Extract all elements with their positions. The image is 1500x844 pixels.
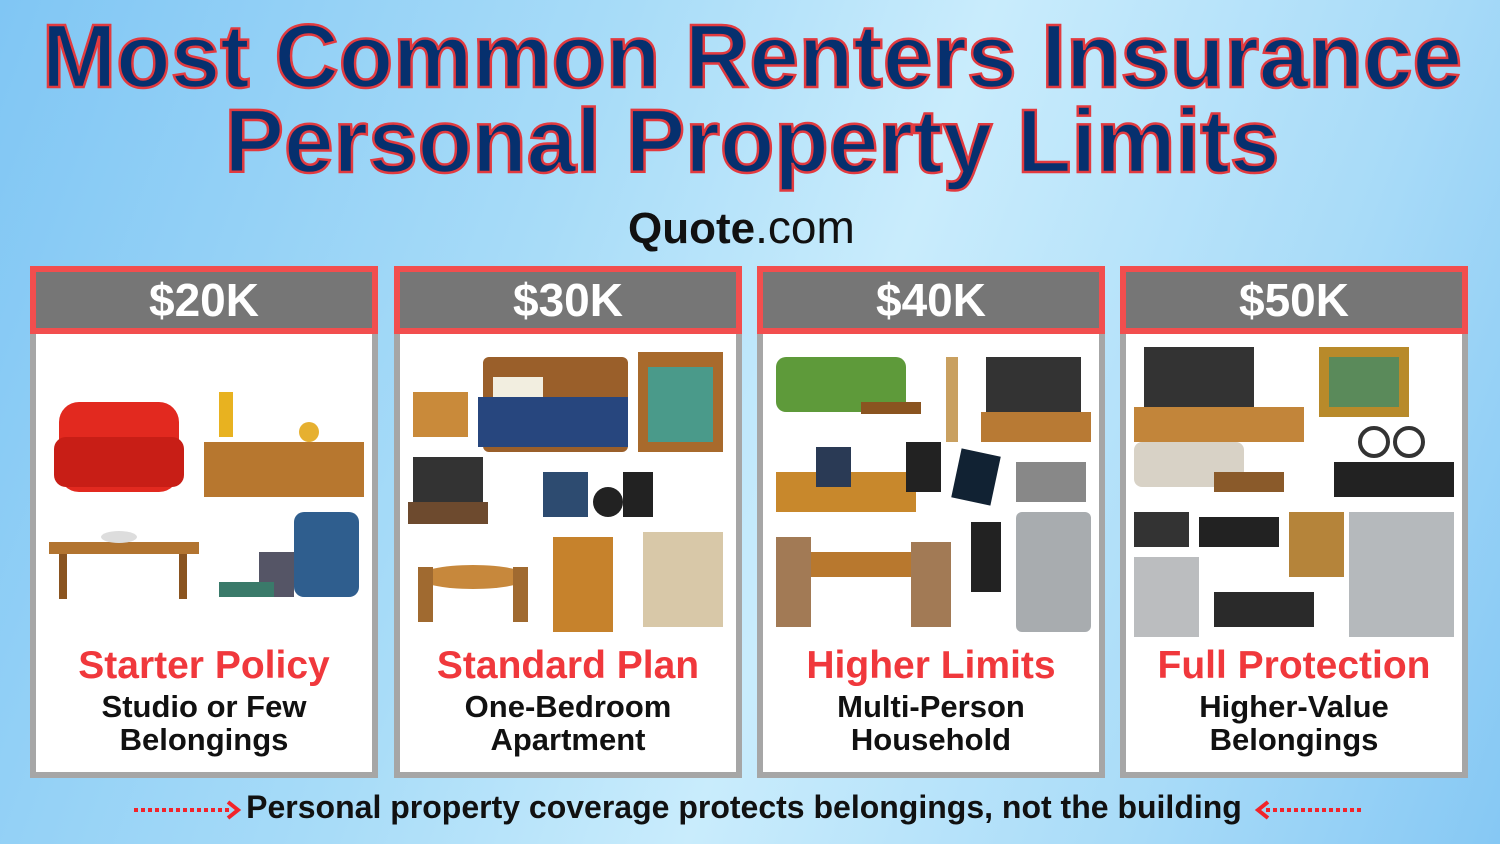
description: Higher-Value [1199, 689, 1389, 724]
description [102, 689, 306, 757]
footer note with arrows [134, 789, 1361, 825]
description: Belongings [1210, 722, 1378, 757]
footer text: Personal property coverage protects belongings, not the building [246, 789, 1242, 825]
description: Multi-Person [837, 689, 1025, 724]
card 3 [757, 266, 1105, 778]
illustration: starter furniture [49, 392, 364, 599]
illustration: household goods [776, 357, 1091, 632]
arrow: left [134, 800, 242, 820]
description [837, 689, 1025, 757]
header: $30K [394, 266, 742, 334]
arrow: right [1254, 800, 1361, 820]
description [1199, 689, 1389, 757]
header: $30K: $30K [513, 274, 623, 326]
header: $50K: $50K [1239, 274, 1349, 326]
logo: Quote.com [628, 201, 855, 253]
card 2 [394, 266, 742, 778]
header: $40K [757, 266, 1105, 334]
card 1 [30, 266, 378, 778]
illustration: high-value belongings [1134, 347, 1454, 637]
description: Belongings [120, 722, 288, 757]
label: Higher Limits [806, 644, 1056, 687]
title [42, 7, 1462, 192]
illustration: one-bedroom furniture [408, 352, 723, 632]
label: Starter Policy [78, 644, 330, 687]
title: Personal Property Limits [224, 92, 1280, 192]
description: One-Bedroom [465, 689, 671, 724]
description: Apartment [490, 722, 646, 757]
description [465, 689, 671, 757]
title: Most Common Renters Insurance [42, 7, 1462, 107]
header: $40K: $40K [876, 274, 986, 326]
label: Full Protection [1158, 644, 1430, 687]
header: $20K [30, 266, 378, 334]
description: Household [851, 722, 1011, 757]
description: Studio or Few [102, 689, 306, 724]
header: $50K [1120, 266, 1468, 334]
header: $20K: $20K [149, 274, 259, 326]
card 4 [1120, 266, 1468, 778]
label: Standard Plan [437, 644, 699, 687]
